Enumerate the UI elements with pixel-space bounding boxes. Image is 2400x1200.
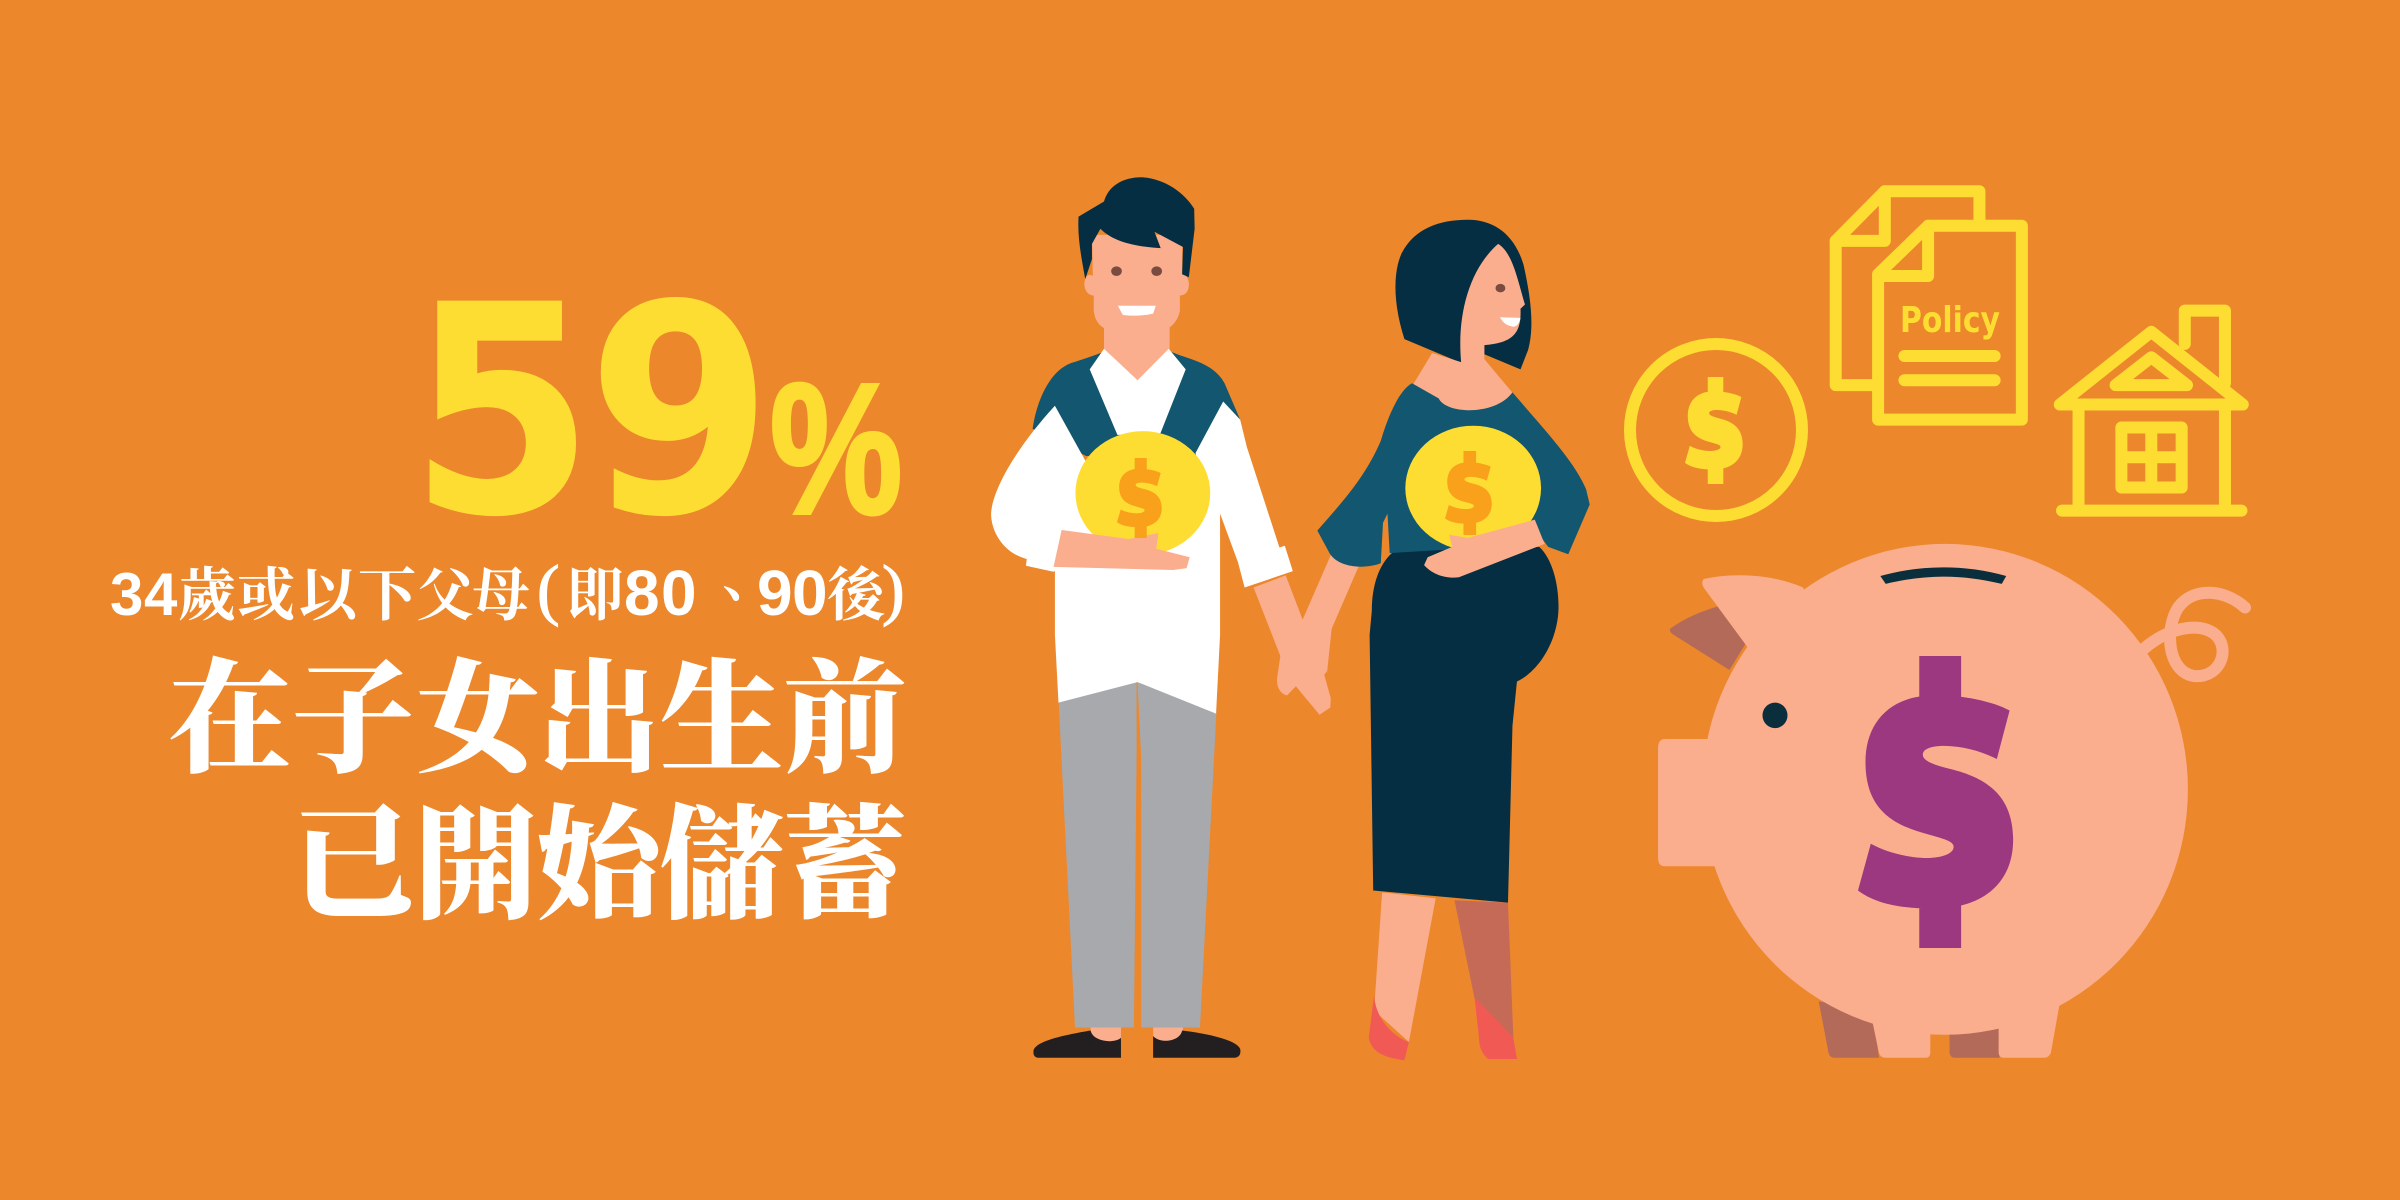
subtitle: parents aged 34 or below: )	[882, 551, 905, 627]
subtitle: parents aged 34 or below: 、	[704, 548, 762, 632]
icon: coin outline	[1630, 344, 1802, 516]
big statistic: 59%	[409, 242, 902, 581]
big statistic: 59%: 5	[409, 242, 595, 581]
icon: man's coin dollar sign	[1117, 458, 1162, 538]
big statistic: 59%: %	[770, 345, 902, 553]
subtitle: parents aged 34 or below: 歲或以下父母	[178, 548, 530, 632]
subtitle: parents aged 34 or below: 即	[566, 548, 624, 632]
man figure	[991, 177, 1331, 1058]
subtitle: parents aged 34 or below: 34	[110, 561, 178, 628]
subtitle: parents aged 34 or below	[110, 548, 905, 632]
icon: woman's coin dollar sign	[1445, 451, 1492, 535]
icon: policy documents	[1836, 191, 2022, 420]
woman figure	[1296, 220, 1590, 1060]
icon: piggy dollar sign	[1858, 656, 2013, 948]
subtitle: parents aged 34 or below: 90	[757, 557, 828, 629]
subtitle: parents aged 34 or below: (	[537, 551, 560, 627]
headline line 1: 在子女出生前	[168, 652, 907, 789]
piggy bank	[1658, 544, 2245, 1058]
icon: house	[2060, 311, 2243, 511]
subtitle: parents aged 34 or below: 後	[827, 548, 888, 632]
subtitle: parents aged 34 or below: 80	[624, 557, 697, 629]
big statistic: 59%: 9	[587, 242, 773, 581]
icon: policy documents: Policy	[1900, 300, 2000, 341]
headline line 2: 已開始儲蓄	[291, 798, 907, 935]
